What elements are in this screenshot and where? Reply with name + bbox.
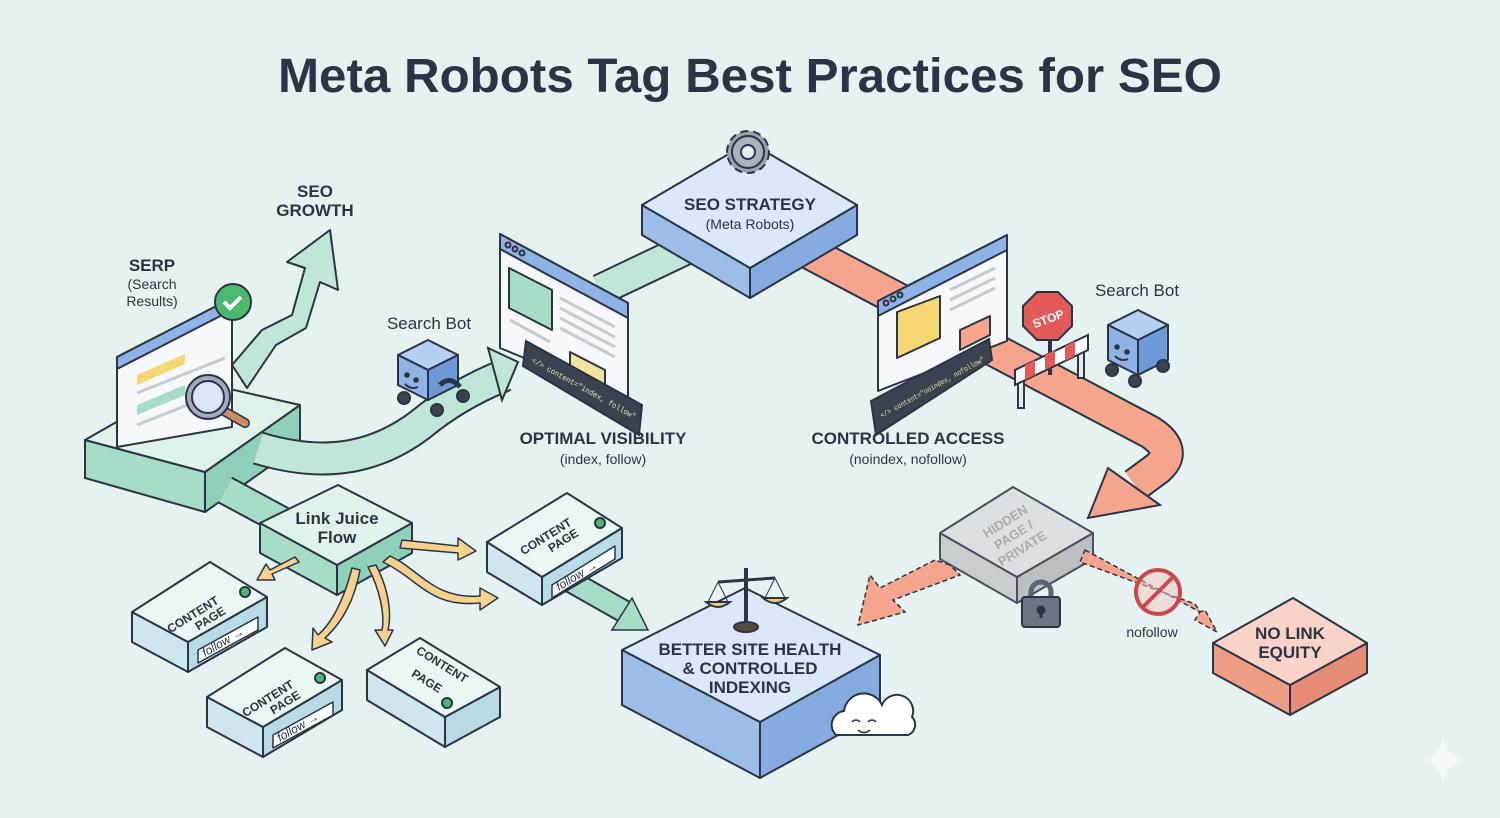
icon: barrier <box>1015 335 1088 408</box>
heading: SEO growth: GROWTH <box>276 201 354 220</box>
heading: controlled access <box>812 429 1004 467</box>
label: search bot left: Search Bot <box>387 314 471 333</box>
panel: content page 4: PAGE <box>546 526 581 555</box>
panel: content page 1: follow → <box>200 624 246 660</box>
icon: cloud <box>832 693 915 735</box>
icon: prohibited <box>1136 570 1180 614</box>
panel: content page 2: follow → <box>274 709 321 745</box>
heading: SERP <box>126 256 178 309</box>
panel: SERP browser <box>117 298 232 447</box>
icon: padlock <box>1022 582 1060 627</box>
panel: SEO strategy block: (Meta Robots) <box>706 216 794 232</box>
heading: SERP: SERP <box>129 256 175 275</box>
panel: optimal visibility browser <box>500 234 628 401</box>
panel: better site health block: & CONTROLLED <box>682 659 818 678</box>
heading: SERP: (Search <box>127 276 177 292</box>
icon: sparkle <box>1421 735 1465 785</box>
panel: link juice flow block <box>260 485 412 595</box>
panel: SEO strategy block: SEO STRATEGY <box>684 195 817 214</box>
panel: content page 2: PAGE <box>268 688 303 717</box>
icon: search bot left <box>398 340 469 416</box>
heading: controlled access: CONTROLLED ACCESS <box>812 429 1004 448</box>
panel: no link equity block: NO LINK <box>1255 624 1326 643</box>
heading: optimal visibility: (index, follow) <box>560 451 646 467</box>
panel: no link equity block <box>1213 598 1367 715</box>
heading: optimal visibility <box>520 429 687 467</box>
panel: SERP platform <box>85 380 300 512</box>
icon: scale <box>706 568 787 632</box>
panel: content page 2 <box>207 648 342 757</box>
code bar: noindex, nofollow: </> content="noindex, nofollow" <box>880 356 987 421</box>
label: search bot right: Search Bot <box>1095 281 1179 300</box>
title: Meta Robots Tag Best Practices for SEO <box>278 50 1222 103</box>
panel: hidden page block: PAGE / <box>991 517 1036 553</box>
arrow: green to site health <box>565 578 648 630</box>
heading: SEO growth <box>276 182 354 220</box>
panel: controlled access browser <box>878 235 1007 391</box>
panel: better site health block: INDEXING <box>709 678 791 697</box>
icon: magnifier <box>186 375 245 423</box>
heading: controlled access: (noindex, nofollow) <box>849 451 967 467</box>
panel: hidden page block: PRIVATE <box>995 527 1049 569</box>
panel: no link equity block: EQUITY <box>1258 643 1322 662</box>
panel: link juice flow block: Link Juice <box>295 509 379 528</box>
panel: content page 1: CONTENT <box>165 593 222 636</box>
icon: stop sign: STOP <box>1031 307 1066 331</box>
connector: SERP to link juice <box>225 490 290 525</box>
arrow: dashed nofollow <box>1080 550 1217 632</box>
panel: content page 4 <box>487 493 622 605</box>
arrow: big green curve to optimal visibility <box>258 348 518 458</box>
arrows: link juice yellow <box>257 538 498 650</box>
code bar: noindex, nofollow <box>871 339 992 435</box>
icon: check badge <box>215 284 251 320</box>
panel: content page 3: PAGE <box>409 666 445 696</box>
panel: hidden page block: HIDDEN <box>980 502 1030 541</box>
code bar: index, follow <box>523 341 642 435</box>
panel: content page 2: CONTENT <box>240 677 297 720</box>
panel: better site health block <box>622 588 880 778</box>
panel: content page 3: CONTENT <box>414 643 471 686</box>
panel: content page 1: PAGE <box>193 604 228 633</box>
panel: better site health block: BETTER SITE HEALTH <box>659 640 841 659</box>
arrow: SEO growth <box>232 230 338 388</box>
connector: green band to optimal visibility <box>600 240 705 290</box>
icon: stop sign <box>1023 292 1072 375</box>
connector: salmon band to controlled access <box>795 245 1166 518</box>
code bar: index, follow: </> content="index, follow" <box>530 357 637 422</box>
panel: content page 4: follow → <box>553 558 600 594</box>
panel: content page 1 <box>132 562 267 672</box>
panel: content page 4: CONTENT <box>518 515 575 558</box>
panel: SEO strategy block <box>642 142 857 298</box>
icon: gear <box>727 131 769 173</box>
heading: SEO growth: SEO <box>297 182 333 201</box>
heading: SERP: Results) <box>126 293 178 309</box>
label: nofollow: nofollow <box>1126 624 1179 640</box>
panel: content page 3 <box>367 638 500 747</box>
heading: optimal visibility: OPTIMAL VISIBILITY <box>520 429 687 448</box>
icon: search bot right <box>1106 310 1169 387</box>
panel: hidden page block <box>940 487 1093 603</box>
panel: link juice flow block: Flow <box>318 528 357 547</box>
arrow: dashed salmon to site health <box>858 560 960 625</box>
